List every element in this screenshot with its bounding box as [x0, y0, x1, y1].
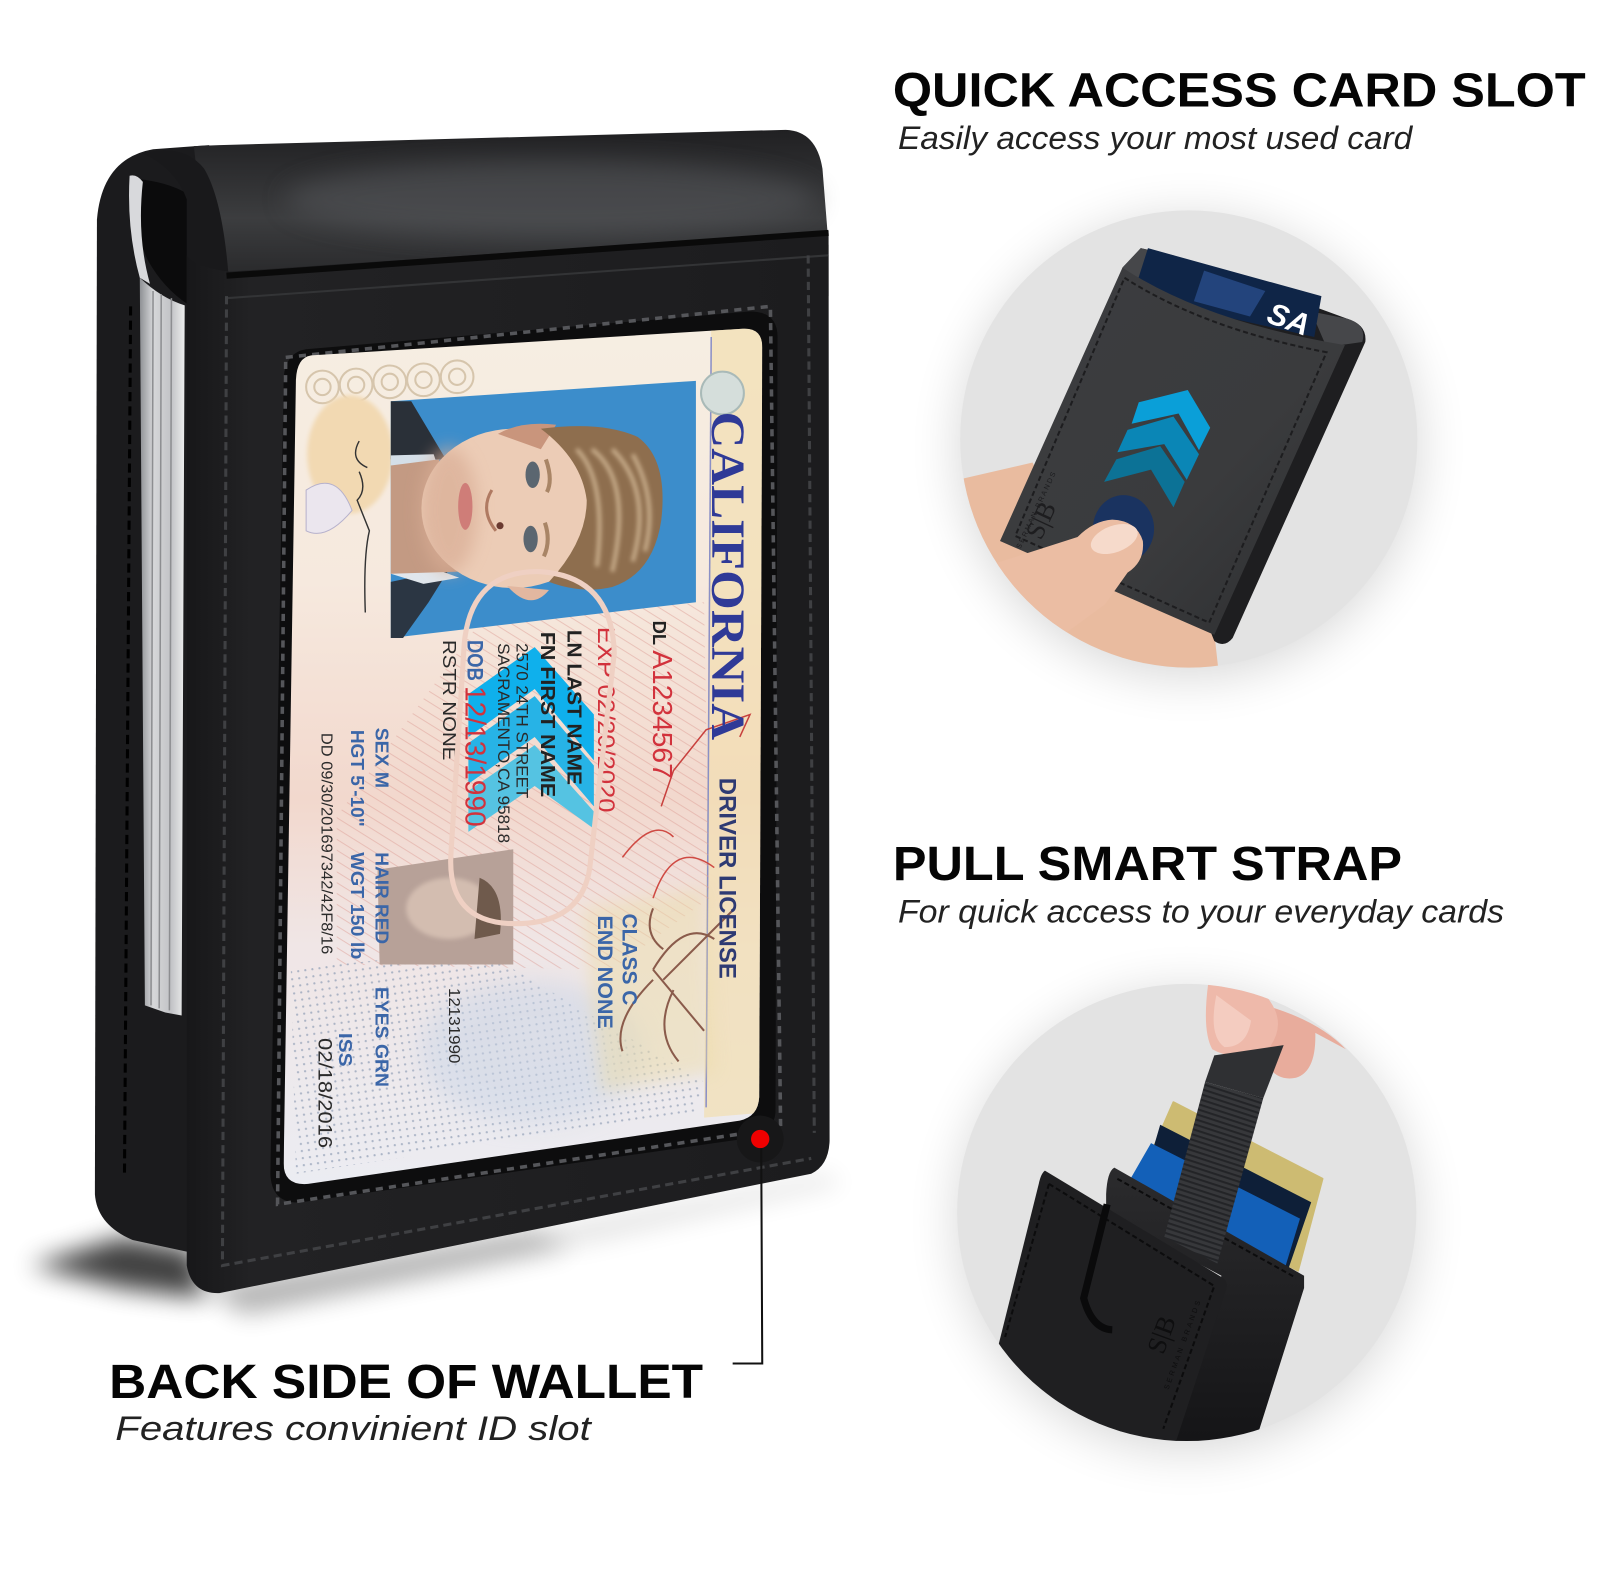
card data fields: 2570 24TH STREET [512, 643, 530, 798]
heading: back side of wallet: BACK SIDE OF WALLET [109, 1356, 703, 1409]
wallet in hand [949, 248, 1365, 679]
blue chevrons [468, 647, 594, 832]
front panel [998, 1171, 1227, 1449]
embossed logo [1141, 1300, 1202, 1391]
card data fields: HGT 5'-10" [347, 730, 368, 827]
callout leader line [733, 1148, 762, 1363]
top flap edge [1122, 248, 1363, 347]
front panel [187, 231, 830, 1293]
card data fields: ISS [335, 1033, 356, 1067]
card data fields: WGT 150 lb [347, 852, 368, 959]
embossed logo: SERMAN BRANDS [1163, 1300, 1202, 1391]
wave line pattern [337, 602, 709, 970]
right tan band [704, 327, 765, 1118]
card data fields [313, 621, 678, 1148]
wallet front face [1000, 268, 1345, 635]
circle shadow [960, 219, 1417, 676]
rear panel stitching [124, 306, 131, 1174]
circle shadow [958, 992, 1415, 1449]
main wallet: back side with ID window [31, 130, 842, 1363]
photo background [391, 381, 696, 638]
chevrons [1104, 390, 1210, 507]
card data fields: LN LAST NAME [562, 630, 584, 785]
eyes [526, 461, 540, 488]
card data fields: EXP 02/20/2020 [592, 627, 619, 812]
nose [487, 490, 496, 531]
flower [306, 483, 352, 533]
card data fields: DD 09/30/201697342/42F8/16 [317, 733, 334, 954]
inserted card [1133, 248, 1321, 337]
card data fields: EYES GRN [372, 987, 393, 1087]
seam below flap [227, 233, 829, 276]
front panel stitching [1005, 1184, 1214, 1429]
left fold strip [143, 150, 229, 306]
dot pattern [291, 949, 704, 1174]
neck [391, 459, 459, 574]
strap leather tab [1205, 1045, 1284, 1098]
heading: pull smart strap: PULL SMART STRAP [893, 838, 1402, 891]
card data fields: SACRAMENTO,CA 95818 [494, 643, 512, 843]
ground shadow [31, 1174, 842, 1315]
card data fields: A1234567 [647, 650, 678, 779]
shirt collar [390, 454, 436, 466]
state seal [701, 372, 744, 415]
subtext: quick access: Easily access your most used card [898, 119, 1414, 156]
guilloche rings [306, 360, 473, 403]
ID card [276, 322, 770, 1189]
embossed logo: SERMAN BRANDS [1015, 471, 1058, 550]
card visa text: SA [1263, 296, 1315, 343]
gold card [1138, 1102, 1322, 1271]
U slot [1084, 1204, 1112, 1330]
card data fields: RSTR NONE [439, 640, 460, 760]
embossed logo: S|B [1019, 497, 1062, 544]
state outline [661, 715, 750, 806]
strap [1164, 1082, 1263, 1263]
card data fields: END NONE [593, 916, 617, 1029]
blue card [1128, 1143, 1300, 1266]
card data fields: 12/13/1990 [458, 686, 490, 827]
front panel stitching [222, 255, 814, 1266]
front stitching [1015, 278, 1327, 623]
head [421, 429, 605, 588]
circle background [960, 210, 1417, 668]
map tint [582, 888, 714, 1092]
circle background [957, 984, 1416, 1441]
subtext: pull smart strap: For quick access to your everyday cards [898, 893, 1504, 930]
orange seal patch [307, 395, 393, 513]
callout dot [737, 1116, 784, 1162]
fingers [1206, 984, 1346, 1078]
thumb [995, 520, 1143, 635]
card data fields: 12131990 [445, 988, 462, 1063]
thumb slot [1093, 495, 1154, 562]
rear wallet panel [95, 145, 209, 1255]
embossed logo: S|B [1141, 1312, 1182, 1357]
state name: CALIFORNIA [701, 411, 754, 740]
lips [458, 483, 472, 530]
panel: quick access circle [949, 210, 1417, 679]
window stitching [278, 306, 781, 1204]
card data fields: CLASS C [617, 913, 641, 1005]
card data fields: DOB [462, 640, 487, 681]
top flap [194, 130, 829, 306]
money clip [129, 175, 188, 1016]
rear panel [1106, 1168, 1304, 1449]
card data fields: FN FIRST NAME [536, 632, 558, 797]
ghost photo [378, 849, 513, 965]
photo [391, 381, 696, 638]
hair label over ghost photo: HAIR RED [372, 852, 393, 944]
ear [498, 424, 556, 449]
subtext: back side: Features convinient ID slot [115, 1410, 592, 1448]
licence title: DRIVER LICENSE [713, 778, 740, 979]
heading: quick access card slot: QUICK ACCESS CARD SLOT [893, 64, 1586, 117]
card data fields: DL [649, 621, 670, 645]
panel: pull strap circle [957, 984, 1416, 1449]
transparent oval ring [451, 572, 614, 924]
card base [276, 322, 770, 1189]
card data fields: SEX M [372, 728, 393, 788]
card data fields: 02/18/2016 [313, 1038, 335, 1148]
dark card [1143, 1125, 1311, 1271]
hand [964, 462, 1218, 668]
jacket [391, 401, 446, 459]
flap highlight [286, 160, 816, 238]
jaw shadow [420, 447, 478, 574]
wallet back panel [1122, 248, 1365, 644]
map rivers [620, 908, 735, 1061]
hair [541, 426, 663, 590]
ID window frame [270, 311, 778, 1202]
signature [356, 441, 369, 612]
rear panel stitching [1117, 1179, 1296, 1278]
